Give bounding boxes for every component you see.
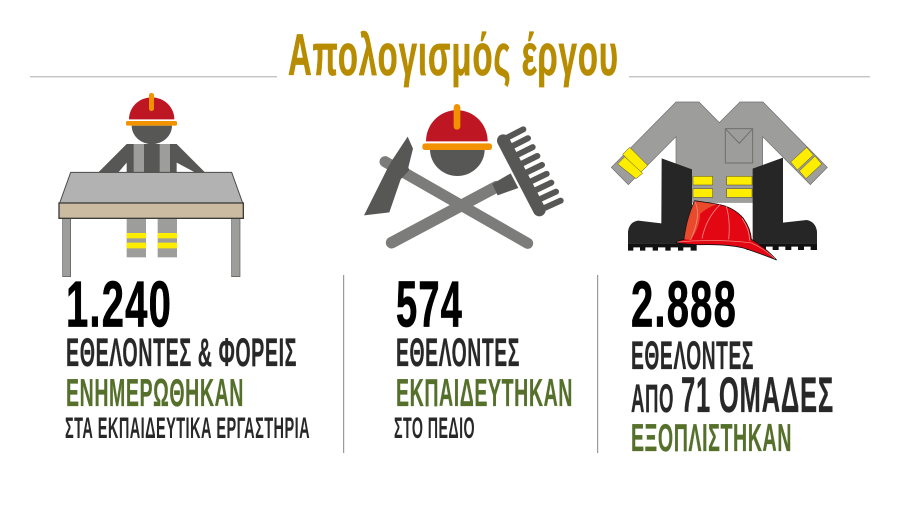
desk edge <box>59 203 243 218</box>
icon: helmet with crossed tools <box>364 104 561 243</box>
infographic canvas: ΣΤΑ ΕΚΠΑΙΔΕΥΤΙΚΑ ΕΡΓΑΣΤΗΡΙΑ <box>65 412 310 445</box>
icon: protective suit, boots and helmet <box>611 102 827 260</box>
panel: volunteers trained <box>394 268 573 445</box>
number: 2.888 <box>631 268 737 340</box>
panel: volunteers equipped <box>631 268 834 460</box>
rake head <box>492 129 561 211</box>
worker arms and torso <box>98 144 205 172</box>
handle <box>385 162 528 243</box>
legs <box>127 218 146 257</box>
reflective stripes <box>618 147 822 197</box>
desk top <box>60 172 243 203</box>
pocket <box>725 129 753 163</box>
number: 1.240 <box>66 268 172 340</box>
panel: volunteers trained: ΕΘΕΛΟΝΤΕΣ <box>396 331 520 375</box>
highlighted verb: ΕΚΠΑΙΔΕΥΤΗΚΑΝ <box>396 372 573 415</box>
icon: worker at desk <box>59 93 243 277</box>
panel: volunteers equipped: ΑΠΟ <box>631 377 674 421</box>
worker head <box>132 126 172 144</box>
title: Απολογισμός έργου <box>288 23 619 88</box>
panel: volunteers trained: ΣΤΟ ΠΕΔΙΟ <box>394 412 475 445</box>
jacket <box>611 102 827 202</box>
right boot <box>753 158 817 243</box>
panel: volunteers informed: ΕΘΕΛΟΝΤΕΣ & ΦΟΡΕΙΣ <box>66 331 297 375</box>
number: 574 <box>396 268 463 340</box>
hard hat <box>126 93 177 126</box>
left boot <box>628 158 692 243</box>
fire helmet <box>676 201 777 260</box>
highlighted verb: ΕΝΗΜΕΡΩΘΗΚΑΝ <box>66 372 244 415</box>
panel: volunteers equipped: ΕΘΕΛΟΝΤΕΣ <box>631 334 754 378</box>
handle <box>392 187 497 243</box>
hard hat <box>422 104 492 176</box>
desk legs <box>63 218 71 277</box>
panel: volunteers informed <box>65 268 310 445</box>
pickaxe head <box>364 137 413 215</box>
